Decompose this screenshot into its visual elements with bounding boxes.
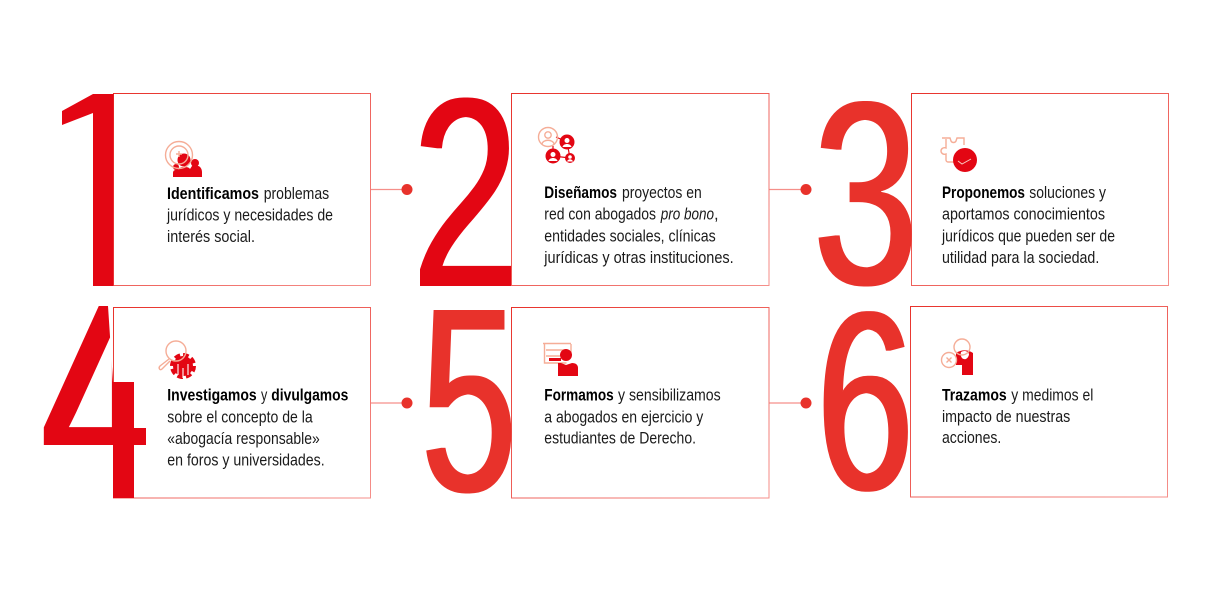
numeral 1: 1 <box>45 34 137 346</box>
text: investigamos <box>167 387 348 470</box>
text: identificamos: Identificamos <box>167 185 259 203</box>
connector 2 to 3 <box>769 184 812 195</box>
text: proponemos <box>941 184 1115 267</box>
text: formamos: a abogados en ejercicio y <box>544 408 704 426</box>
panel: step 3 <box>813 48 1168 340</box>
text: identificamos: problemas <box>264 185 329 203</box>
text: trazamos: acciones. <box>942 429 1001 447</box>
text: formamos <box>544 387 721 447</box>
text: trazamos: y medimos el <box>1011 387 1093 405</box>
connector 1 to 2 <box>370 184 412 195</box>
icon: network of people <box>538 128 575 164</box>
connector 4 to 5 <box>370 398 412 408</box>
numeral 3: 3 <box>813 48 918 340</box>
text: investigamos: en foros y universidades. <box>167 452 325 470</box>
text: identificamos <box>166 185 333 246</box>
text: proponemos: utilidad para la sociedad. <box>942 249 1099 267</box>
text: investigamos: «abogacía responsable» <box>167 430 320 448</box>
icon: tracking circles and figure <box>942 339 973 375</box>
text: trazamos: impacto de nuestras <box>942 408 1070 426</box>
text: formamos: y sensibilizamos <box>618 387 721 405</box>
text: identificamos: jurídicos y necesidades de <box>166 207 333 225</box>
text: diseñamos: proyectos en <box>622 184 702 202</box>
icon: presenter with board <box>543 344 578 376</box>
text: diseñamos: pro bono <box>660 206 714 224</box>
text: trazamos <box>942 387 1093 447</box>
text: investigamos: y <box>261 387 268 405</box>
text: diseñamos: Diseñamos <box>544 184 617 202</box>
text: diseñamos <box>543 184 734 267</box>
text: formamos: estudiantes de Derecho. <box>544 429 696 447</box>
text: proponemos: soluciones y <box>1029 184 1107 202</box>
text: diseñamos: red con abogados <box>544 206 656 224</box>
text: investigamos: divulgamos <box>271 387 348 405</box>
icon: puzzle piece and check <box>941 138 977 172</box>
icon: magnifier over gear <box>159 341 194 378</box>
text: proponemos: Proponemos <box>942 184 1025 202</box>
text: identificamos: interés social. <box>167 228 255 246</box>
text: investigamos: Investigamos <box>167 387 257 405</box>
panel: step 6 <box>817 259 1168 544</box>
numeral 6: 6 <box>817 259 914 544</box>
text: proponemos: aportamos conocimientos <box>942 206 1105 224</box>
numeral 5: 5 <box>421 254 517 548</box>
panel: step 2 <box>412 41 769 344</box>
connector 5 to 6 <box>769 398 812 408</box>
text: proponemos: jurídicos que pueden ser de <box>941 227 1115 245</box>
text: diseñamos: jurídicas y otras instituciones. <box>543 249 734 267</box>
text: formamos: Formamos <box>544 387 614 405</box>
numeral 4: 4 <box>43 213 160 565</box>
text: diseñamos: , <box>714 206 719 224</box>
panel: step 4 <box>44 306 371 498</box>
text: investigamos: sobre el concepto de la <box>167 408 313 426</box>
icon: target over people <box>166 142 202 177</box>
panel: step 5 <box>421 254 769 548</box>
text: trazamos: Trazamos <box>942 387 1007 405</box>
numeral 2: 2 <box>412 41 519 344</box>
panel: step 1 <box>62 93 371 286</box>
text: diseñamos: entidades sociales, clínicas <box>544 227 716 245</box>
